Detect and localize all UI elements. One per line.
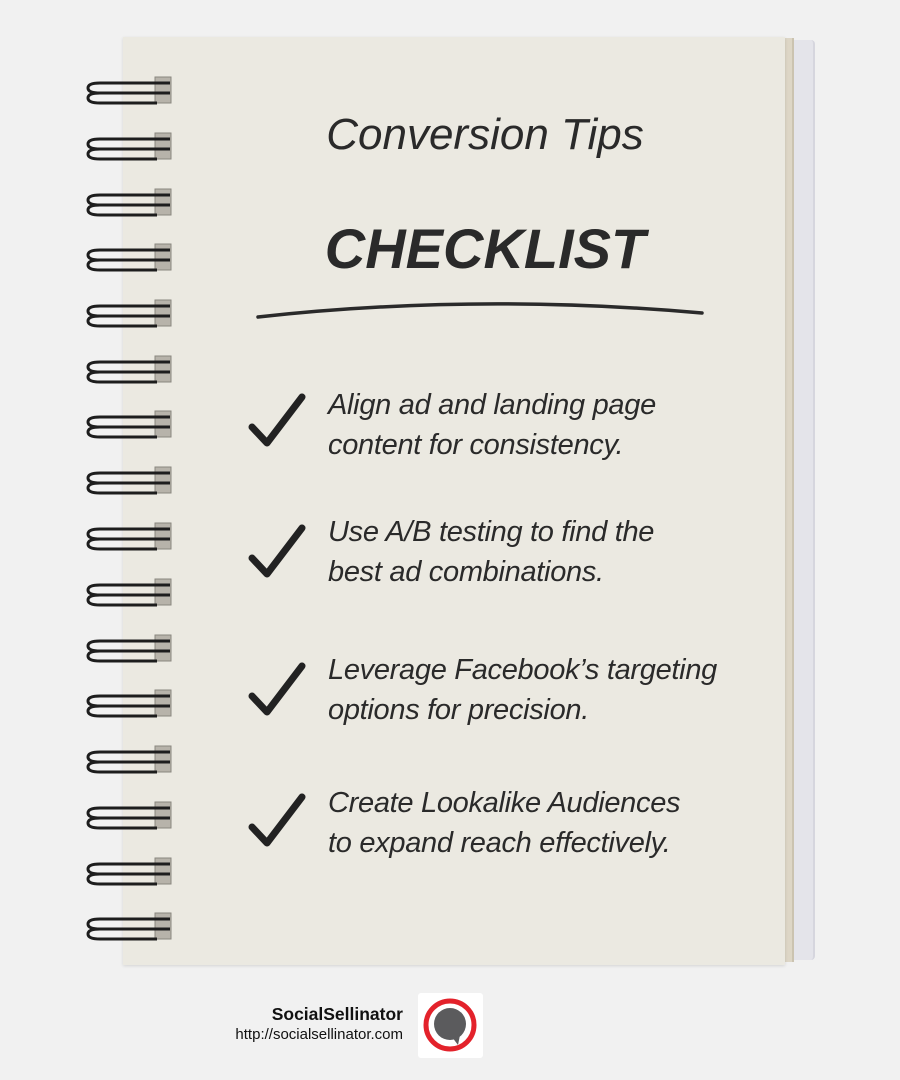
text: Leverage Facebook’s targeting bbox=[328, 654, 717, 686]
back pages bbox=[760, 40, 815, 960]
text bbox=[328, 787, 680, 859]
logo bbox=[418, 993, 483, 1058]
checklist item 1 bbox=[248, 389, 656, 461]
brand text: http://socialsellinator.com bbox=[235, 1026, 403, 1043]
notebook page bbox=[123, 37, 785, 965]
title: Conversion Tips bbox=[326, 110, 644, 159]
icon: check bbox=[248, 394, 306, 446]
text: Create Lookalike Audiences bbox=[328, 787, 680, 819]
text bbox=[326, 389, 656, 461]
icon: check bbox=[248, 524, 306, 578]
text bbox=[328, 654, 717, 726]
text: Use A/B testing to find the bbox=[328, 516, 654, 548]
text: Align ad and landing page bbox=[328, 389, 656, 421]
heading: checklist: CHECKLIST bbox=[325, 217, 645, 280]
checklist item 2 bbox=[248, 516, 654, 588]
checklist item 4 bbox=[248, 787, 680, 859]
icon: check bbox=[248, 794, 306, 846]
checklist item 3 bbox=[248, 654, 717, 726]
text bbox=[328, 516, 654, 588]
brand text: SocialSellinator bbox=[272, 1004, 403, 1024]
spiral binding bbox=[86, 76, 172, 940]
brand text bbox=[235, 1004, 403, 1043]
text: to expand reach effectively. bbox=[328, 827, 670, 859]
icon: check bbox=[248, 662, 306, 716]
underline stroke bbox=[256, 302, 704, 319]
text: options for precision. bbox=[328, 694, 589, 726]
text: best ad combinations. bbox=[328, 556, 604, 588]
text: content for consistency. bbox=[328, 429, 623, 461]
